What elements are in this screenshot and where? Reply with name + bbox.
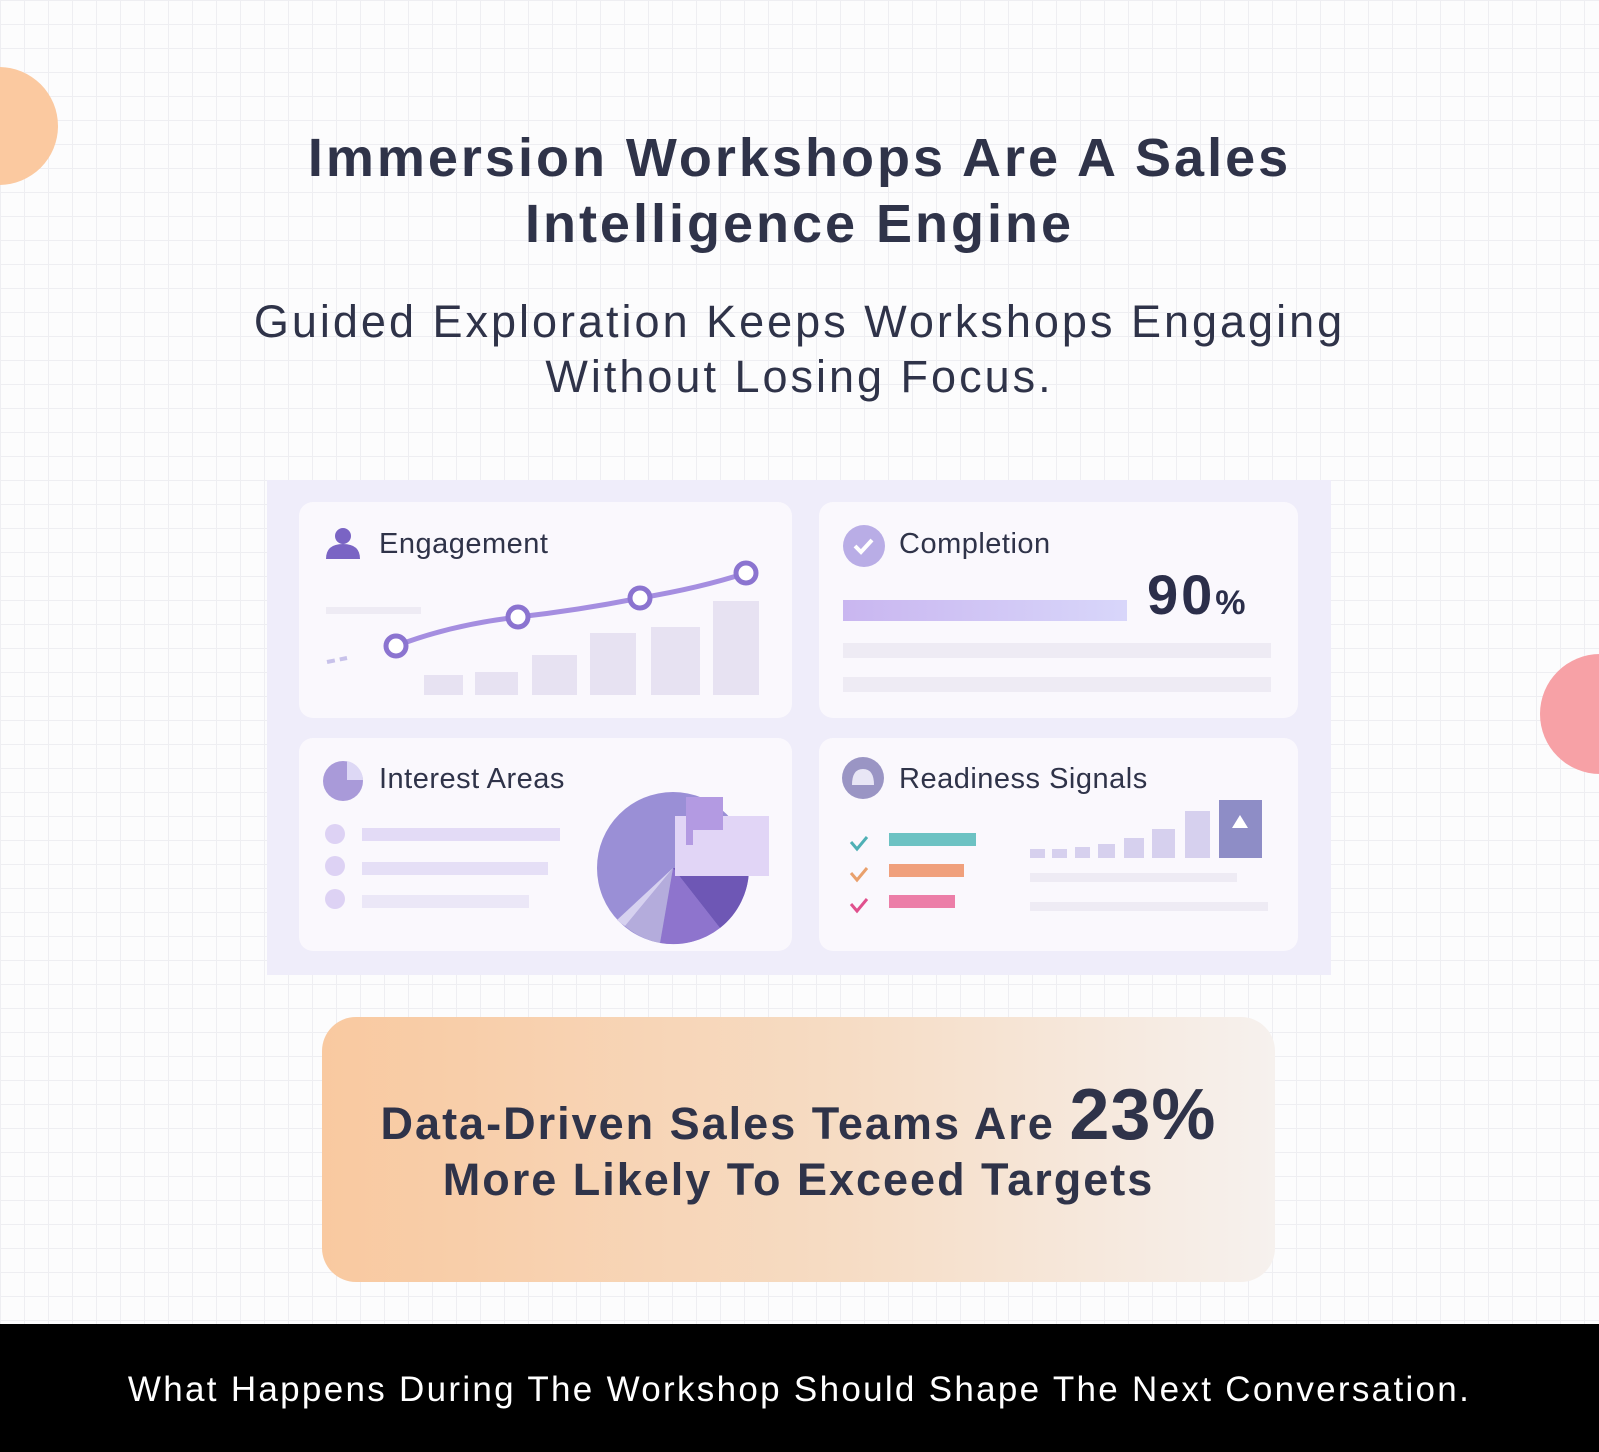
card: readiness signals <box>819 738 1298 951</box>
decorative circle: pink <box>1540 654 1599 774</box>
icon: person <box>326 528 360 559</box>
title: Immersion Workshops Are A Sales <box>308 128 1291 188</box>
icon: check circle <box>843 525 885 567</box>
card: engagement <box>299 502 792 718</box>
card: interest areas <box>299 738 792 951</box>
pie chart <box>597 792 769 944</box>
footer text: What Happens During The Workshop Should Shape The Next Conversation. <box>128 1370 1471 1409</box>
title: Intelligence Engine <box>525 194 1074 254</box>
card: readiness signals: Readiness Signals <box>899 763 1148 795</box>
decorative circle: orange <box>0 67 58 185</box>
callout text: Data-Driven Sales Teams Are 23% <box>381 1075 1216 1155</box>
subtitle: Guided Exploration Keeps Workshops Engaging <box>254 296 1345 347</box>
footer banner <box>0 1324 1599 1452</box>
subtitle: Without Losing Focus. <box>545 351 1054 402</box>
card: engagement: Engagement <box>379 528 548 560</box>
callout text: More Likely To Exceed Targets <box>443 1154 1154 1205</box>
title <box>308 128 1291 254</box>
callout: stat <box>322 1017 1275 1282</box>
icon: bell <box>842 757 884 799</box>
dashboard panel <box>267 480 1331 975</box>
subtitle <box>254 296 1345 402</box>
card: completion <box>819 502 1298 718</box>
icon: pie <box>323 761 363 801</box>
card: completion: 90% <box>1147 563 1249 626</box>
card: interest areas: Interest Areas <box>379 763 565 795</box>
callout text <box>381 1075 1216 1205</box>
card: completion: Completion <box>899 528 1051 560</box>
